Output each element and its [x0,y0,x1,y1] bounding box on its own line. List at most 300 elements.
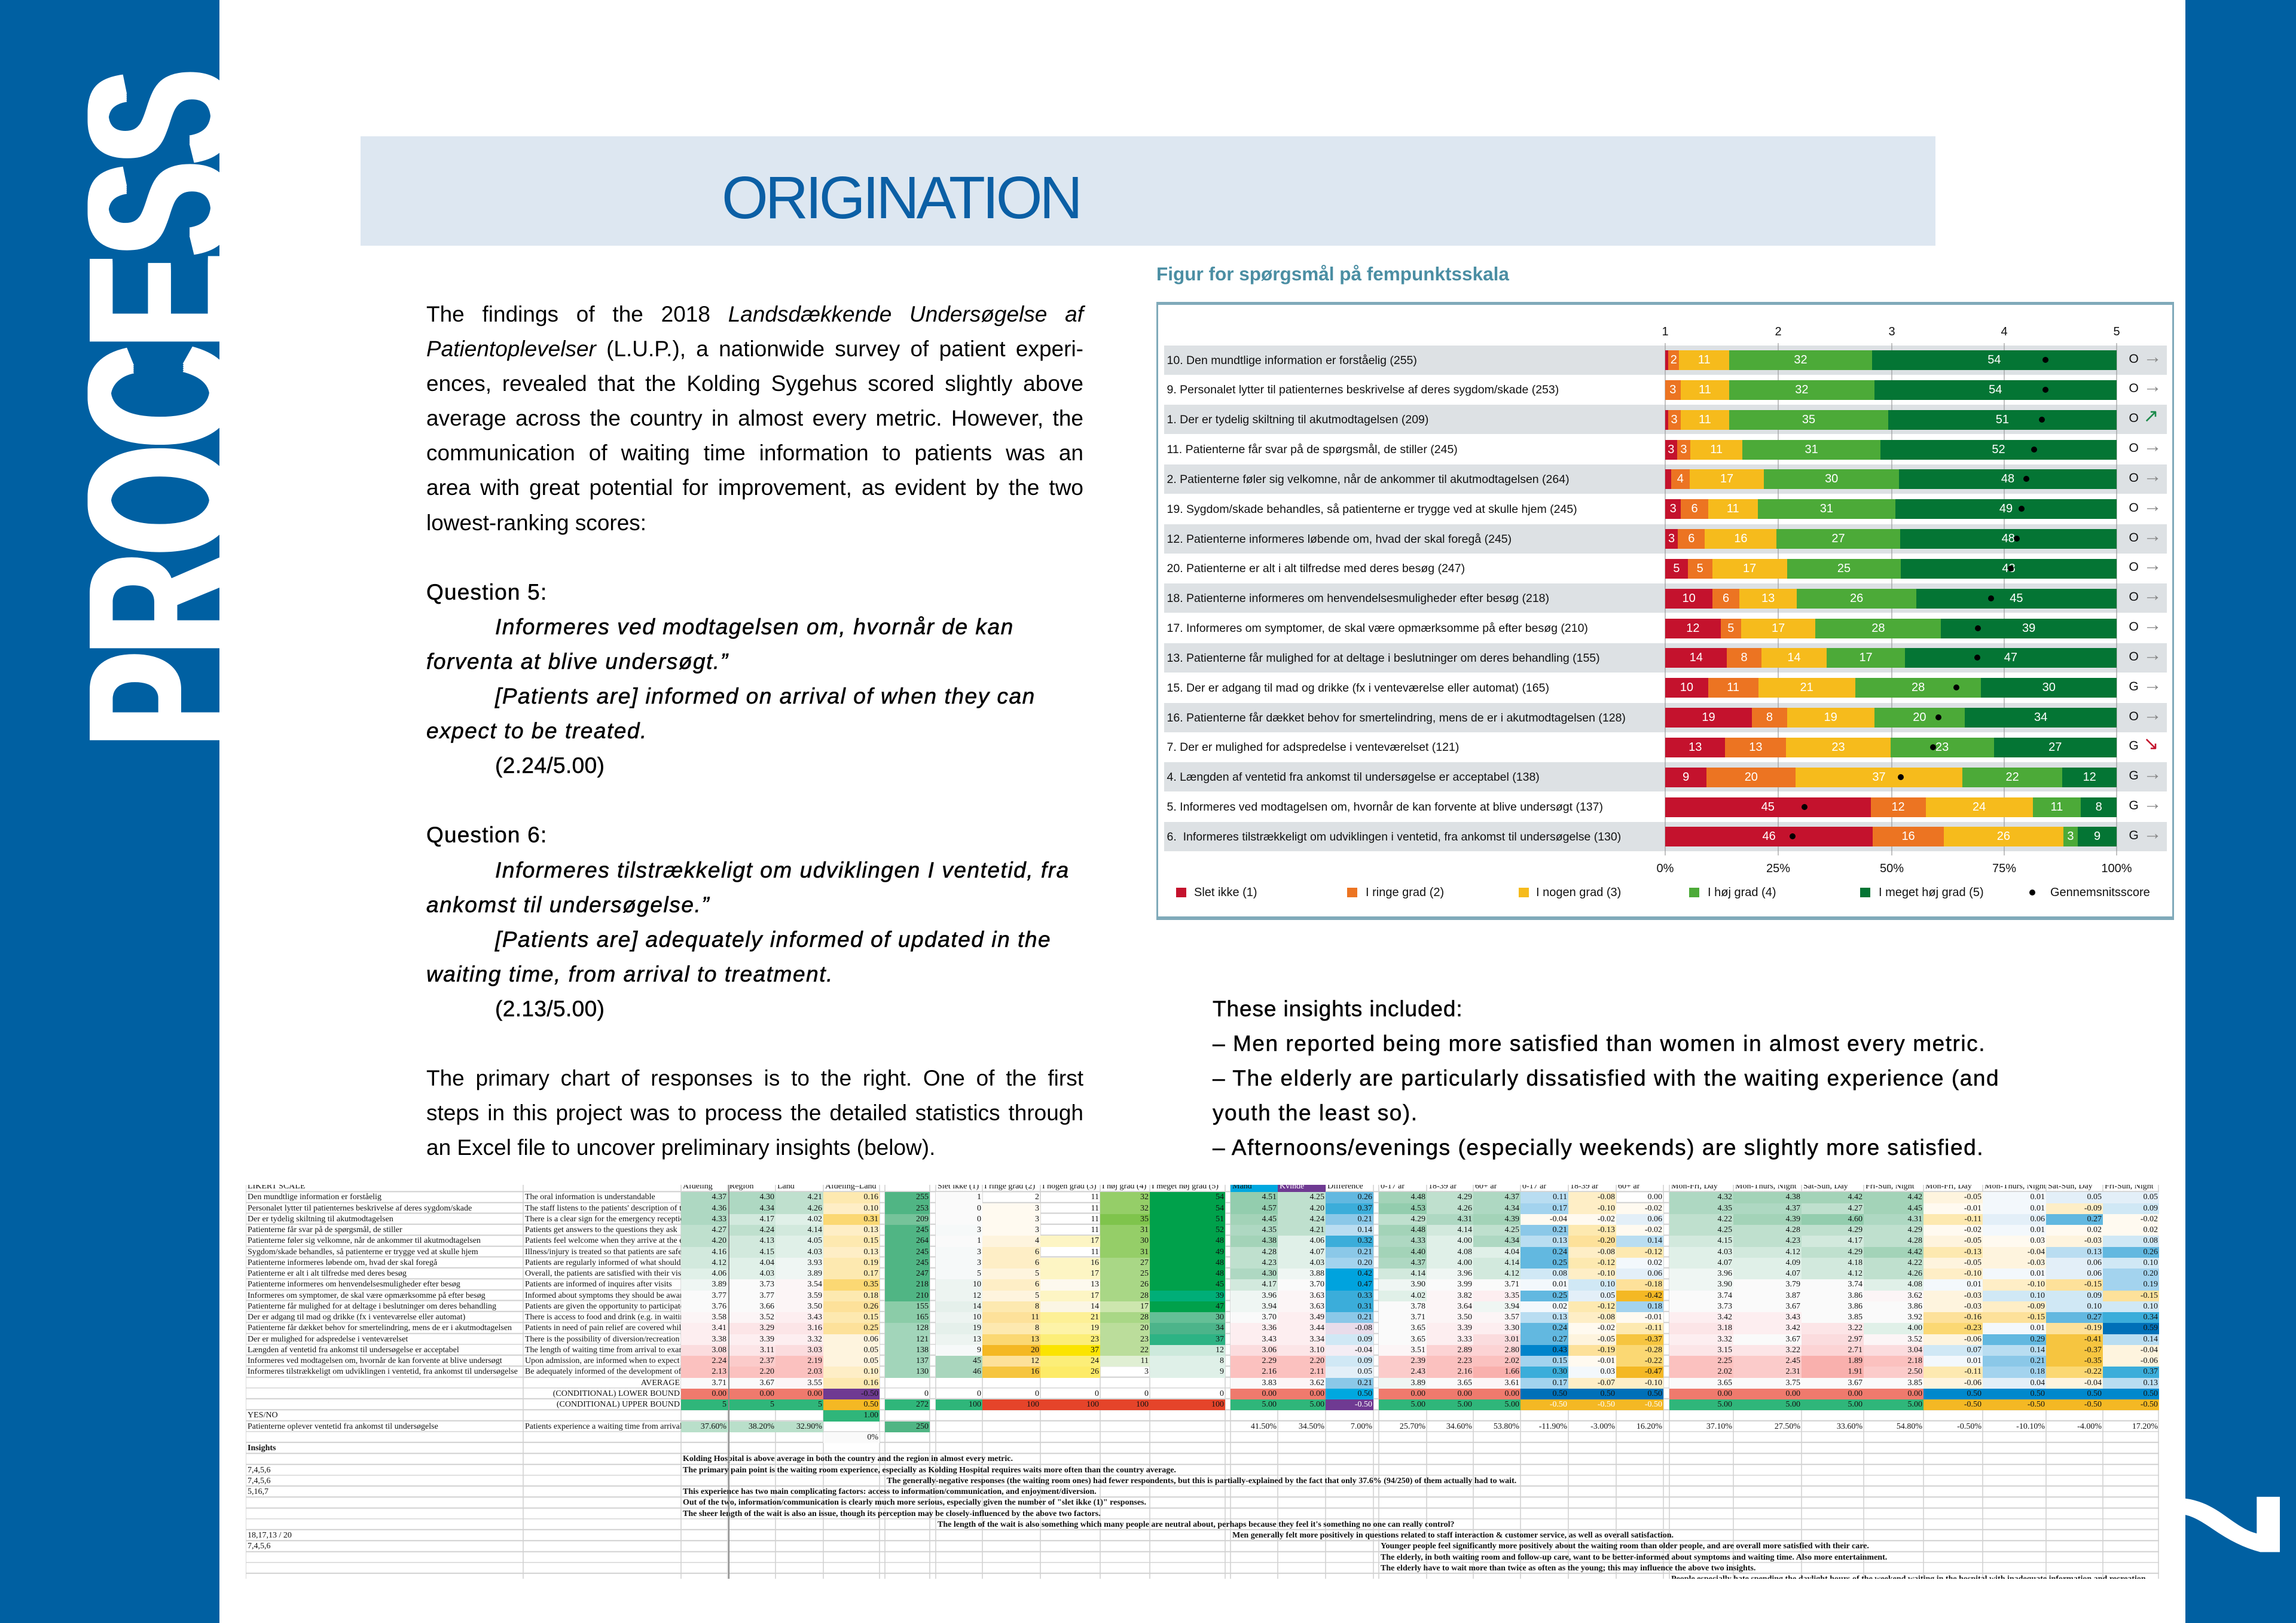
table header row: 3.59 [807,1291,822,1300]
table header row: 0.33 [1357,1291,1372,1300]
table header row: -0.22 [2084,1367,2102,1376]
table header row: 3.34 [1309,1335,1324,1344]
table header row: 3.41 [712,1324,726,1332]
text block: findings and questions: (2.13/5.00) [495,997,604,1021]
table header row: 4.07 [1309,1248,1324,1257]
table header row: 4.28 [1262,1248,1277,1257]
chart row: question 16 [1164,703,2167,732]
table header row: 4.28 [1907,1236,1922,1245]
table header row: -0.12 [1598,1302,1615,1311]
chart axes: 0% [1657,862,1674,875]
table header row: 0 [924,1389,929,1398]
chart row: question 1: 51 [1996,413,2009,426]
chart row: question 4: 22 [2005,771,2019,784]
table header row: 4.14 [1411,1269,1425,1278]
table header row: 0.02 [2087,1225,2102,1234]
table header row: The sheer length of the wait is also an issue, though its perception may be closely-influenced by the above two factors. [683,1509,1101,1518]
chart row: question 20: 48 [2002,562,2016,575]
chart row: question 11: 11. Patienterne får svar på de spørgsmål, de stiller (245) [1167,443,1458,456]
table header row: 7.00% [1351,1422,1372,1431]
table header row: -0.10 [1964,1269,1981,1278]
table header row: 2.25 [1717,1356,1732,1365]
table header row: 3.88 [1309,1269,1324,1278]
chart row: question 18 [1164,583,2167,613]
table header row: -0.02 [1964,1225,1981,1234]
table header row: 0 [1144,1389,1149,1398]
table header row: 4.60 [1848,1215,1863,1224]
table header row: 4.39 [1785,1215,1800,1224]
table header row: 0.50 [2031,1389,2045,1398]
chart row: question 7: ↘ [2143,733,2158,754]
table header row: 2.23 [1458,1356,1472,1365]
table header row: 3.01 [1504,1335,1519,1344]
chart row: question 5: 11 [2051,800,2063,813]
table header row: 4.39 [1504,1215,1519,1224]
table header row: 0.59 [2143,1324,2158,1332]
table header row: 54.80% [1897,1422,1922,1431]
table header row: 0.01 [2031,1193,2045,1202]
text block: findings and questions: lowest-ranking scores: [426,511,646,535]
table header row: 1.00 [863,1411,878,1420]
table header row: 0.05 [2143,1193,2158,1202]
table header row: 0.00 [1648,1193,1662,1202]
table header row: 30 [1140,1236,1149,1245]
table header row: -0.16 [1964,1313,1981,1322]
chart row: question 18: 45 [2010,592,2023,605]
table header row: -0.50 [2028,1400,2045,1409]
table header row: 0.50 [1357,1389,1372,1398]
table header row: 21 [1091,1313,1099,1322]
chart row: question 9: → [2143,375,2162,396]
table header row: 2.80 [1504,1346,1519,1355]
table header row: -0.05 [1598,1335,1615,1344]
table header row: 4.26 [1907,1269,1922,1278]
table header row: -0.10 [1598,1204,1615,1213]
table header row: 100 [1211,1400,1224,1409]
chart row: question 15: G [2129,680,2139,693]
table header row: 26 [1140,1280,1149,1289]
chart row: question 20: 20. Patienterne er alt i alt tilfredse med deres besøg (247) [1167,562,1465,575]
chart row: question 12 [1164,524,2167,554]
table header row: 2.37 [759,1356,774,1365]
chart row: question 9: 3 [1669,383,1676,396]
table header row: 0.10 [863,1204,878,1213]
table header row: -11.90% [1539,1422,1567,1431]
table header row: 0.08 [2143,1236,2158,1245]
table header row: 3.83 [1262,1379,1277,1387]
text block: insights included: – Men reported being more satisfied than women in almost every metric. [1213,1031,1986,1056]
table header row: 5.00 [1785,1400,1800,1409]
table header row: 0.09 [1357,1356,1372,1365]
table header row: 4.26 [1458,1204,1472,1213]
table header row: Patients in need of pain relief are covered while [525,1324,681,1332]
table header row: 4.35 [1717,1204,1732,1213]
table header row: 5.00 [1411,1400,1425,1409]
table header row: 11 [1091,1193,1099,1202]
table header row: 3.50 [807,1302,822,1311]
chart row: question 17: 28 [1871,622,1885,635]
table header row: 0.03 [2031,1236,2045,1245]
chart row: question 19: 19. Sygdom/skade behandles, så patienterne er trygge ved at skulle hjem (245) [1167,503,1577,516]
table header row: -0.47 [1645,1367,1662,1376]
table header row: 4.02 [807,1215,822,1224]
table header row: 9 [1220,1367,1224,1376]
table header row: 4.17 [759,1215,774,1224]
table header row: 0.19 [2143,1280,2158,1289]
table header row: 3.32 [807,1335,822,1344]
chart row: question 5: 24 [1973,800,1986,813]
table header row: -0.05 [1964,1193,1981,1202]
table header row: 3.87 [1785,1291,1800,1300]
table header row: 0.14 [2143,1335,2158,1344]
table header row: -0.07 [1598,1379,1615,1387]
chart row: question 7: 23 [1935,741,1949,754]
text block: findings and questions: Question 6: [426,823,547,847]
table header row: -0.06 [1964,1335,1981,1344]
table header row: 2.20 [759,1367,774,1376]
table header row: -0.03 [1964,1302,1981,1311]
text block: findings and questions: [Patients are] adequately informed of updated in the [495,927,1051,952]
table header row: 28 [1140,1313,1149,1322]
table header row: 4.23 [1785,1236,1800,1245]
table header row: 4.57 [1262,1204,1277,1213]
chart row: question 7: 13 [1689,741,1702,754]
table header row: 0.06 [1648,1215,1662,1224]
table header row: 4.12 [1848,1269,1863,1278]
table header row: Patienterne får dækket behov for smertelindring, mens de er i akutmodtagelsen [248,1324,512,1332]
table header row: -0.37 [2084,1346,2102,1355]
table header row: 4.29 [1458,1193,1472,1202]
table header row: 3.67 [1785,1335,1800,1344]
chart row: question 2: O [2129,471,2139,485]
table header row: 2.02 [1504,1356,1519,1365]
legend: Gennemsnitsscore [2050,886,2150,899]
table header row: 4.45 [1907,1204,1922,1213]
table header row: 54 [1216,1204,1224,1213]
table header row: -0.12 [1645,1248,1662,1257]
table header row: 2.20 [1309,1356,1324,1365]
table header row: 7,4,5,6 [248,1477,270,1486]
table header row: 247 [916,1269,929,1278]
table header row: 16 [1031,1367,1039,1376]
table header row: 100 [969,1400,981,1409]
chart row: question 18: 26 [1850,592,1863,605]
text block: insights included: – The elderly are particularly dissatisfied with the waiting experience (and [1213,1066,1999,1090]
table header row: 0.20 [1357,1258,1372,1267]
table header row: 2.29 [1262,1356,1277,1365]
table header row: 11 [1091,1204,1099,1213]
table header row: 0.03 [1600,1367,1615,1376]
chart row: question 4: 20 [1745,771,1758,784]
table header row: Der er mulighed for adspredelse i venteværelset [248,1335,408,1344]
table header row: 5 [770,1400,774,1409]
table header row: -0.03 [2028,1258,2045,1267]
table header row: -0.02 [1645,1225,1662,1234]
table header row: Personalet lytter til patienternes beskrivelse af deres sygdom/skade [248,1204,472,1213]
table header row: Patienterne oplever ventetid fra ankomst til undersøgelse [248,1422,438,1431]
table header row: -0.10 [1645,1379,1662,1387]
table header row: 3.65 [1717,1379,1732,1387]
table header row: Be adequately informed of the development of [525,1367,681,1376]
chart row: question 11: → [2143,435,2162,456]
chart axes: 75% [1992,862,2016,875]
table header row: 4.34 [759,1204,774,1213]
table header row: 2.43 [1411,1367,1425,1376]
table header row: 3.08 [712,1346,726,1355]
table header row: 4.31 [1458,1215,1472,1224]
table header row: 100 [1027,1400,1039,1409]
table header row: 245 [916,1225,929,1234]
table header row: The elderly, in both waiting room and follow-up care, want to be better-informed about symptoms and waiting time. Also more entertainment. [1381,1553,1887,1562]
chart row: question 1: 3 [1671,413,1678,426]
text block: insights included: youth the least so). [1213,1101,1418,1125]
text block: findings and questions: ankomst til undersøgelse.” [426,893,710,917]
table header row: 0 [1095,1389,1099,1398]
table header row: 0.19 [863,1258,878,1267]
table header row: 3.67 [759,1379,774,1387]
table header row: -0.05 [1964,1258,1981,1267]
table header row: 0.50 [1552,1389,1567,1398]
chart row: question 18: → [2143,584,2162,605]
chart row: question 5: → [2143,793,2162,814]
text block: findings and questions: Informeres ved modtagelsen om, hvornår de kan [495,615,1014,639]
chart row: question 5: 12 [1891,800,1905,813]
table header row: 31 [1140,1248,1149,1257]
table header row: 3.04 [1907,1346,1922,1355]
table header row: -0.11 [1645,1324,1662,1332]
table header row: 0.13 [2143,1379,2158,1387]
text block: findings and questions: The primary chart of responses is to the right. One of the first [426,1066,1083,1090]
table header row: 0.02 [2143,1225,2158,1234]
table header row: 3.50 [1458,1313,1472,1322]
table header row: 4.45 [1262,1215,1277,1224]
table header row: 1 [977,1193,981,1202]
table header row: 137 [916,1356,929,1365]
chart row: question 11: 52 [1992,442,2005,456]
chart row: question 7: 27 [2048,741,2062,754]
table header row: -0.04 [2084,1379,2102,1387]
table header row: 3.16 [807,1324,822,1332]
table header row: -0.01 [1598,1356,1615,1365]
table header row: 0.50 [2143,1389,2158,1398]
table header row: Informeres ved modtagelsen om, hvornår de kan forvente at blive undersøgt [248,1356,502,1365]
table header row: 3.39 [1458,1324,1472,1332]
chart row: question 17: 12 [1686,622,1700,635]
table header row: 4.05 [807,1236,822,1245]
text block: insights included: – Afternoons/evenings (especially weekends) are slightly more satisfied. [1213,1135,1984,1160]
table header row: 3.43 [1262,1335,1277,1344]
table header row: 0.47 [1357,1280,1372,1289]
table header row: -0.10 [1598,1269,1615,1278]
table header row: 45 [973,1356,981,1365]
text block: findings and questions: forventa at blive undersøgt.” [426,649,729,674]
legend: I ringe grad (2) [1366,886,1444,899]
table header row: -0.50 [1550,1400,1567,1409]
table header row: 4.20 [712,1236,726,1245]
table header row: 4.48 [1411,1193,1425,1202]
table header row: 34 [1216,1324,1224,1332]
table header row: 4.28 [1785,1225,1800,1234]
chart row: question 15: 21 [1800,681,1813,694]
chart axes [1156,302,2174,900]
table header row: 3.51 [1411,1346,1425,1355]
table header row: 3.74 [1848,1280,1863,1289]
table header row: 4.31 [1907,1215,1922,1224]
table header row: 19 [973,1324,981,1332]
table header row: 253 [916,1204,929,1213]
table header row: -0.22 [1645,1356,1662,1365]
table header row: 0.00 [1848,1389,1863,1398]
chart row: question 13 [1164,643,2167,673]
table header row: 0.13 [863,1225,878,1234]
table header row: 3.65 [1458,1379,1472,1387]
table header row: 0.07 [1967,1346,1981,1355]
table header row: -0.19 [1598,1346,1615,1355]
table header row: 0.13 [2087,1248,2102,1257]
table header row: 0.32 [1357,1236,1372,1245]
table header row: 2.50 [1907,1367,1922,1376]
table header row: 3.99 [1458,1280,1472,1289]
table header row: 0.50 [2087,1389,2102,1398]
table header row: -0.15 [2084,1280,2102,1289]
table header row: 11 [1031,1313,1039,1322]
table header row: 9 [977,1346,981,1355]
chart row: question 13: 14 [1787,651,1801,664]
table header row: 0.00 [1504,1389,1519,1398]
table header row: 0.21 [2031,1356,2045,1365]
table header row: 4.38 [1785,1193,1800,1202]
table header row: 0.37 [1357,1204,1372,1213]
table header row: 46 [973,1367,981,1376]
table header row: 4.25 [1504,1225,1519,1234]
table header row: 0.08 [1552,1269,1567,1278]
table header row: 4.14 [807,1225,822,1234]
table header row: 3 [1035,1215,1039,1224]
table header row: 3.74 [1717,1291,1732,1300]
table header row: 0.17 [1552,1204,1567,1213]
table header row: 245 [916,1248,929,1257]
table header row: The elderly have to wait more than twice as often as the young; this may influence the above two insights. [1381,1564,1755,1573]
table header row: 22 [1140,1346,1149,1355]
table header row: Patienterne er alt i alt tilfredse med deres besøg [248,1269,407,1278]
table header row: 3.89 [712,1280,726,1289]
table header row: 27 [1140,1258,1149,1267]
table header row: 4.03 [1717,1248,1732,1257]
table header row: 0.00 [1785,1389,1800,1398]
table header row: 3.10 [1309,1346,1324,1355]
table header row [246,1181,2159,1585]
chart row: question 19 [1167,495,2162,519]
chart row: question 2: → [2143,465,2162,486]
chart row: question 18: O [2129,590,2139,604]
table header row: 3.44 [1309,1324,1324,1332]
table header row: 0.34 [2143,1313,2158,1322]
table header row: 3.96 [1262,1291,1277,1300]
table header row: -0.23 [1964,1324,1981,1332]
table header row: 24 [1091,1356,1099,1365]
text block: findings and questions: an Excel file to uncover preliminary insights (below). [426,1135,935,1160]
chart row: question 15: 15. Der er adgang til mad og drikke (fx i venteværelse eller automat) (165) [1167,681,1549,695]
table header row: 0.16 [863,1193,878,1202]
table header row: 0.00 [1907,1389,1922,1398]
table header row: 6 [1035,1280,1039,1289]
table header row: -0.06 [2141,1356,2158,1365]
table header row: 4.03 [759,1269,774,1278]
chart row: question 10: 32 [1794,353,1808,366]
chart row: question 13: 13. Patienterne får mulighed for at deltage i beslutninger om deres behandling (155) [1167,652,1600,665]
table header row: 0.06 [2087,1269,2102,1278]
table header row: 11 [1091,1215,1099,1224]
table: survey statistics [246,1181,2159,1585]
table header row: 0.00 [1262,1389,1277,1398]
table header row: -0.41 [2084,1335,2102,1344]
table header row: 0.14 [2031,1346,2045,1355]
table header row: 26 [1091,1367,1099,1376]
chart row: question 19: 49 [1999,502,2013,515]
right band with page number [2185,0,2296,1623]
chart row: question 11: 31 [1805,442,1818,456]
chart axes: 1 [1662,325,1669,338]
chart axes: 2 [1775,325,1782,338]
table header row: 4.04 [1504,1248,1519,1257]
table header row: -0.13 [1598,1225,1615,1234]
table header row: 4.22 [1907,1258,1922,1267]
table header row: 2.39 [1411,1356,1425,1365]
table header row: 6 [1035,1248,1039,1257]
table header row: 4.35 [1262,1225,1277,1234]
table header row: 3.85 [1907,1379,1922,1387]
table header row: 209 [916,1215,929,1224]
table header row: 13 [973,1335,981,1344]
table header row: 0.10 [2143,1258,2158,1267]
table header row: 4.25 [1309,1193,1324,1202]
table header row: 4.06 [712,1269,726,1278]
table header row: 3.57 [1504,1313,1519,1322]
chart axes: 5 [2113,325,2120,338]
table header row: 2.02 [1717,1367,1732,1376]
table header row: 4.12 [1504,1269,1519,1278]
table header row: 3.86 [1848,1302,1863,1311]
table header row: 3.42 [1785,1324,1800,1332]
table header row: 0.25 [1552,1291,1567,1300]
table header row: 3 [1144,1367,1149,1376]
table header row: 14 [1091,1302,1099,1311]
table header row: 48 [1216,1258,1224,1267]
table header row: -0.50 [1964,1400,1981,1409]
table header row: 2.97 [1848,1335,1863,1344]
chart row: question 9: O [2129,381,2139,395]
table header row: 8 [1220,1356,1224,1365]
table header row: 4.08 [1907,1280,1922,1289]
table header row: 3.52 [759,1313,774,1322]
table header row: 3.22 [1848,1324,1863,1332]
table header row: The oral information is understandable [525,1193,655,1202]
chart row: question 17: 17. Informeres om symptomer, de skal være opmærksomme på efter besøg (210) [1167,622,1588,635]
table header row: 0.25 [863,1324,878,1332]
table header row: 37.60% [701,1422,726,1431]
table header row: 0.50 [1600,1389,1615,1398]
table header row: 37 [1216,1335,1224,1344]
table header row: -0.12 [1598,1258,1615,1267]
left band with PROCESS heading [0,0,219,1623]
chart row: question 12: 27 [1831,532,1845,545]
table header row: 3.61 [1504,1379,1519,1387]
chart row: question 12: → [2143,525,2162,545]
table header row: 0.02 [1552,1302,1567,1311]
table header row: 3.70 [1309,1280,1324,1289]
table header row: The length of waiting time from arrival to exam [525,1346,681,1355]
chart row: question 17: 5 [1727,622,1734,635]
